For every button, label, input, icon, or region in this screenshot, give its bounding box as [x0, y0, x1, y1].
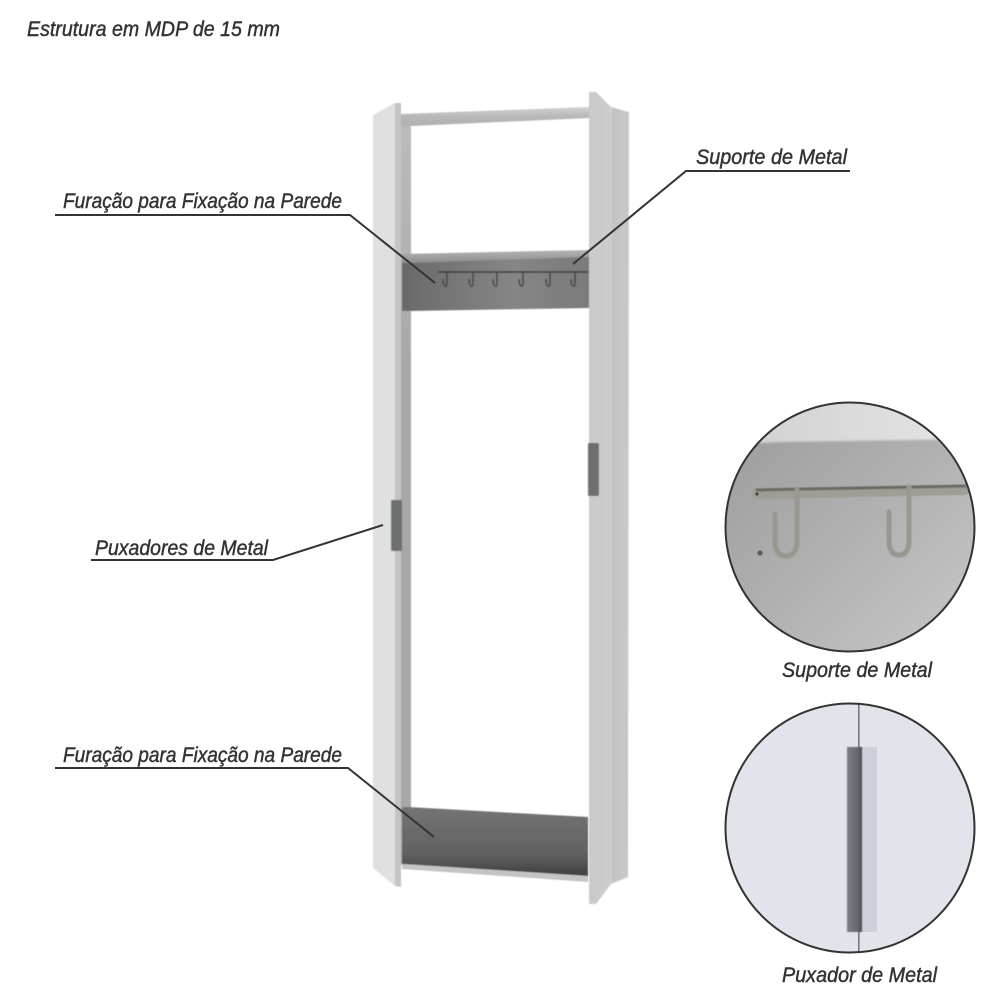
- callout: Furação para Fixação na Parede (bottom): [55, 744, 434, 837]
- callout: Puxadores de Metal: Puxadores de Metal: [95, 537, 269, 560]
- detail circle: metal support: [725, 402, 975, 652]
- title: Estrutura em MDP de 15 mm: [27, 18, 280, 41]
- callout: Suporte de Metal: Suporte de Metal: [696, 146, 848, 169]
- callout: Suporte de Metal: [573, 146, 850, 264]
- metal hook rail: [438, 272, 589, 286]
- left side panel: [401, 115, 411, 865]
- callout: Puxadores de Metal: [91, 525, 383, 560]
- caption: Suporte de Metal: Suporte de Metal: [782, 659, 933, 682]
- callout: Furação para Fixação na Parede (top): Furação para Fixação na Parede: [63, 190, 342, 213]
- top rail: [401, 107, 589, 126]
- left door: [373, 103, 401, 887]
- hook rail: [757, 486, 965, 556]
- detail circle: metal handle: [725, 703, 975, 953]
- lower compartment: [402, 807, 588, 882]
- upper shelf: [402, 250, 589, 311]
- right door: [589, 92, 629, 904]
- callout: Furação para Fixação na Parede (bottom): Furação para Fixação na Parede: [63, 744, 342, 767]
- callout: Furação para Fixação na Parede (top): [55, 190, 435, 283]
- cabinet illustration: [373, 92, 629, 904]
- caption: Puxador de Metal: Puxador de Metal: [782, 964, 938, 987]
- right door handle: [588, 443, 599, 496]
- left door handle: [391, 500, 402, 551]
